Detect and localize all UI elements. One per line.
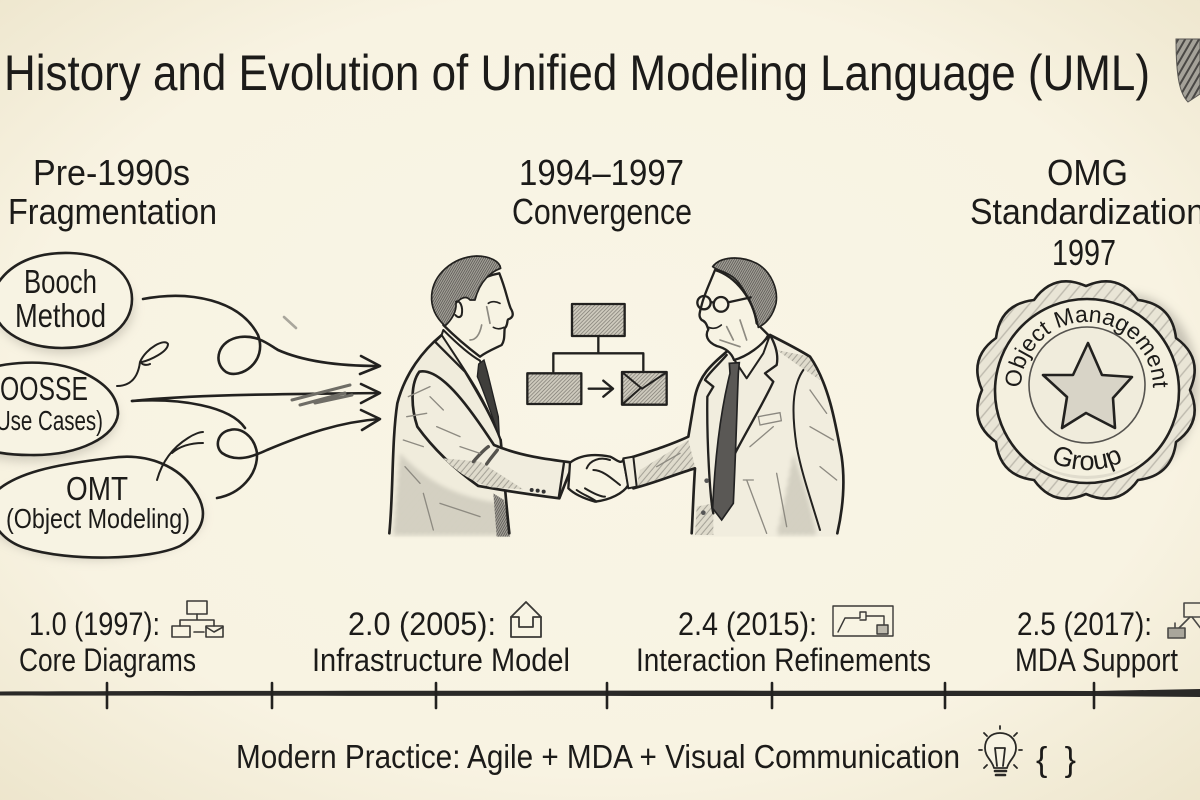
seal: Object Management Group: Group <box>1054 447 1121 472</box>
heading: pre-1990s fragmentation: Fragmentation <box>8 191 217 232</box>
hair <box>432 256 501 326</box>
heading: 1994-1997 convergence <box>512 152 692 232</box>
bubble: Booch Method <box>0 253 134 354</box>
version: 1.0 (1997) <box>19 606 196 678</box>
jacket body fill <box>389 335 511 537</box>
bubble: OMT Object Modeling: (Object Modeling) <box>6 503 190 534</box>
arrow: Booch to convergence <box>143 296 380 374</box>
heading: pre-1990s fragmentation: Pre-1990s <box>33 152 190 193</box>
jacket fill <box>623 335 843 537</box>
tie <box>713 363 739 520</box>
bubble: OOSSE Use Cases <box>0 363 118 462</box>
head <box>443 273 513 357</box>
heading: 1994-1997 convergence: Convergence <box>512 191 692 232</box>
UML diagram <box>527 304 667 405</box>
seal: Object Management Group: Object Management <box>1006 308 1168 388</box>
bubble: Booch Method: Method <box>15 297 106 334</box>
version: 2.0 (2005): 2.0 (2005): <box>348 606 496 642</box>
right man <box>623 258 843 537</box>
version: 1.0 (1997): 1.0 (1997): <box>29 606 160 642</box>
jacket back and front outlines <box>389 335 509 533</box>
tie <box>477 360 499 437</box>
head <box>700 270 768 360</box>
icon: class diagram <box>172 601 223 637</box>
seal: Object Management Group <box>976 280 1200 500</box>
bubble: OMT Object Modeling: OMT <box>66 470 128 507</box>
version: 1.0 (1997): Core Diagrams <box>19 642 196 678</box>
jacket folds <box>403 387 480 530</box>
version: 2.0 (2005) <box>312 606 570 678</box>
squiggles near bubbles <box>117 342 203 480</box>
buttons <box>704 478 709 483</box>
heading: 1994-1997 convergence: 1994–1997 <box>519 152 684 193</box>
heading: OMG standardization 1997: 1997 <box>1052 232 1116 273</box>
icon: interaction diagram <box>833 606 893 636</box>
bubble: Booch Method: Booch <box>24 263 97 300</box>
version: 2.4 (2015) <box>636 606 931 678</box>
version: 2.0 (2005): Infrastructure Model <box>312 642 570 678</box>
pocket <box>758 413 781 425</box>
jacket shading <box>637 440 695 487</box>
lapels <box>705 355 727 513</box>
timeline <box>0 683 1200 708</box>
sleeve <box>413 371 573 498</box>
heading: OMG standardization 1997 <box>970 152 1200 273</box>
icon: curly braces: { } <box>1036 741 1076 779</box>
jacket outlines <box>623 335 843 533</box>
version: 2.5 (2017) <box>1015 606 1178 678</box>
arrow: OMT to convergence <box>132 400 380 498</box>
hair <box>713 258 776 327</box>
left man <box>389 256 573 537</box>
jacket shading <box>393 453 509 535</box>
shirt <box>733 335 770 378</box>
folds <box>657 390 837 533</box>
icon: hatched shield in title <box>1176 39 1200 102</box>
shirt and collar <box>442 330 495 427</box>
glasses <box>697 296 751 312</box>
icon: package with arrow <box>511 602 541 637</box>
hands <box>568 455 637 502</box>
arrow: OOSSE to convergence <box>132 384 380 405</box>
heading: pre-1990s fragmentation <box>8 152 217 232</box>
heading: OMG standardization 1997: OMG <box>1047 152 1128 193</box>
bubble: OOSSE Use Cases: OOSSE <box>0 370 88 407</box>
illustration: handshake with UML diagram <box>389 256 843 537</box>
version: 2.4 (2015): 2.4 (2015): <box>678 606 817 642</box>
bubble: OMT Object Modeling <box>0 457 203 560</box>
icon: MDA tree <box>1168 603 1200 638</box>
icon: light bulb <box>979 726 1022 775</box>
version: 2.5 (2017): 2.5 (2017): <box>1017 606 1152 642</box>
version: 2.4 (2015): Interaction Refinements <box>636 642 931 678</box>
footer: modern practice: Modern Practice: Agile + MDA + Visual Communication <box>236 738 960 775</box>
version: 2.5 (2017): MDA Support <box>1015 642 1178 678</box>
star <box>1043 343 1132 428</box>
